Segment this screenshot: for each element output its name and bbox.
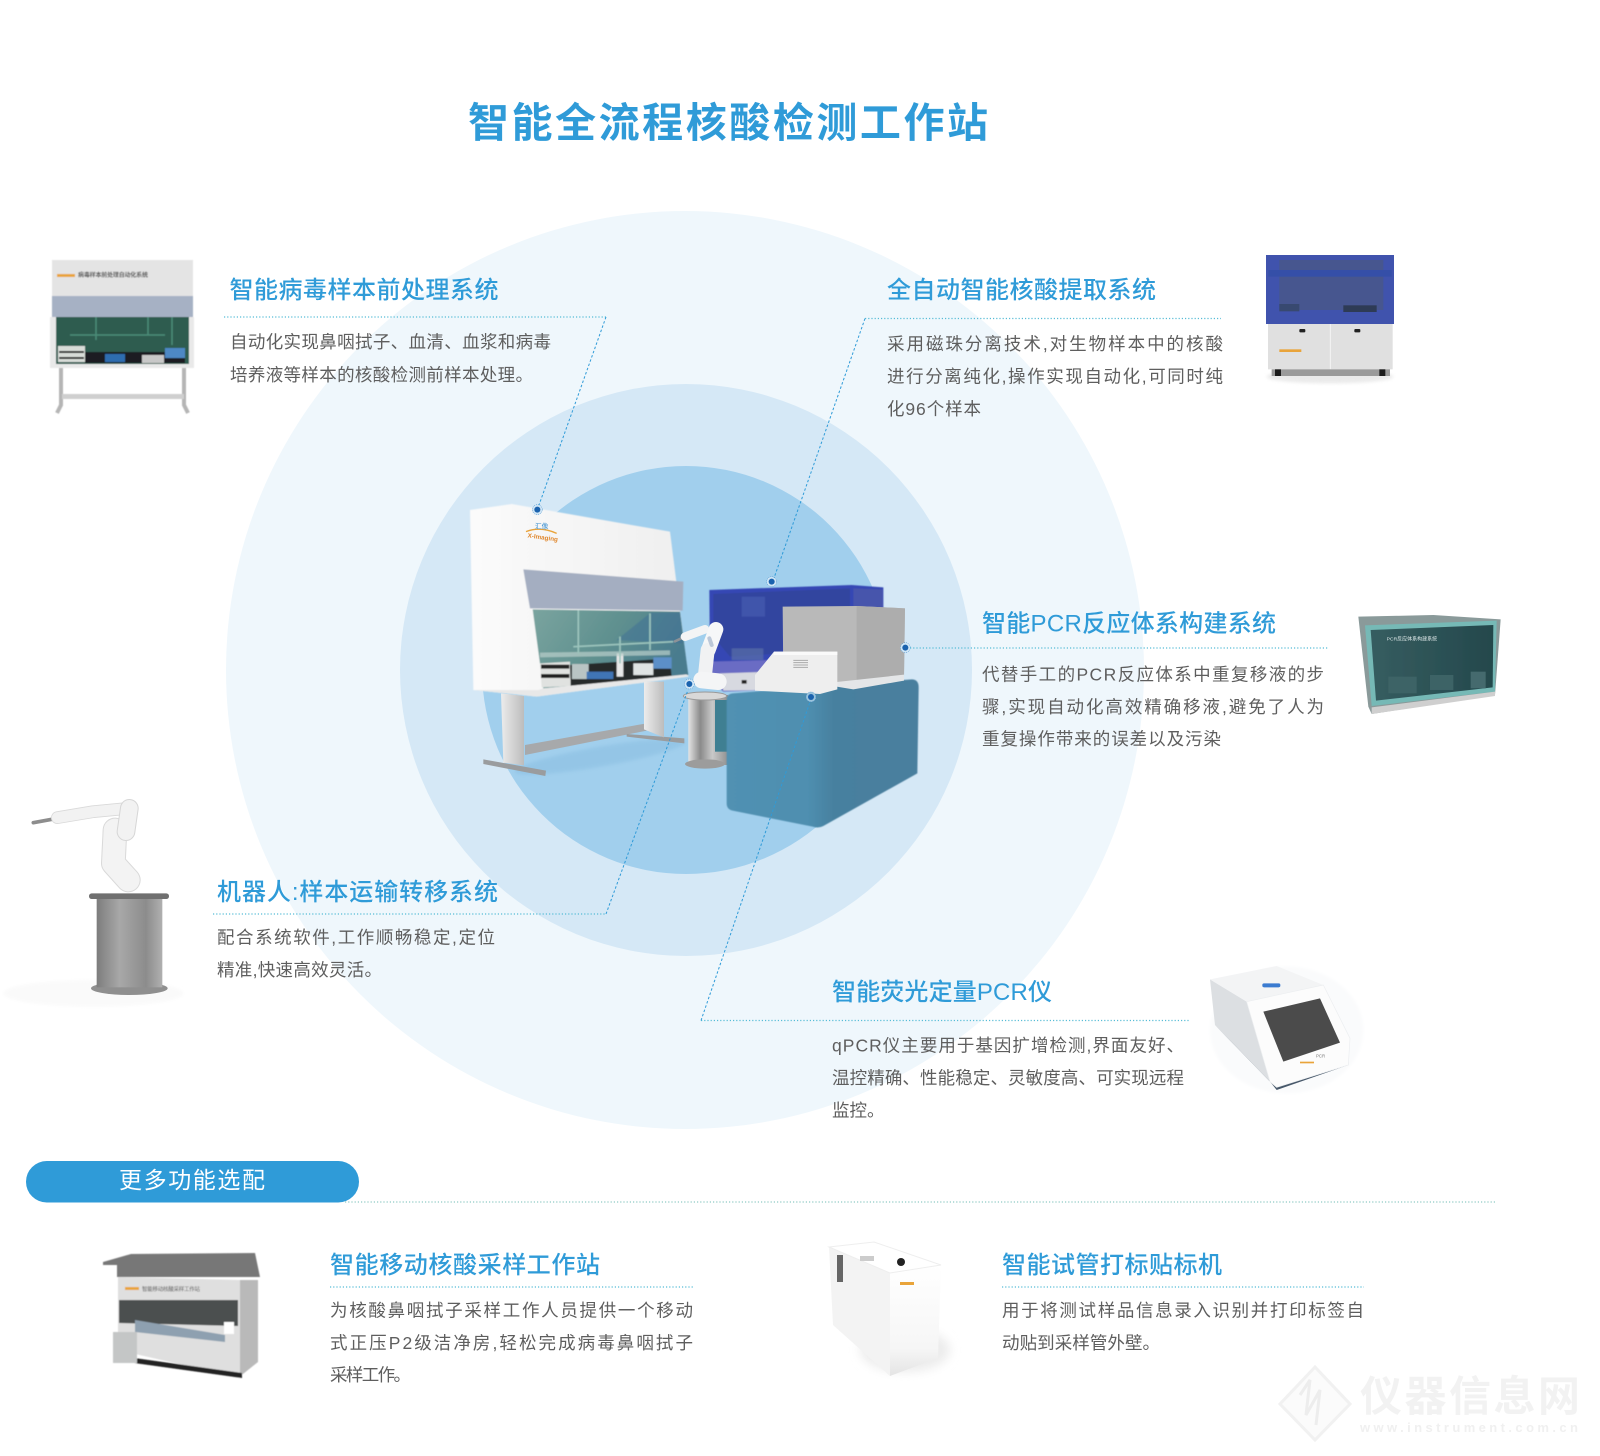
icon: mobile sampling station: 智能移动核酸采样工作站	[142, 1285, 200, 1293]
watermark: www.instrument.com.cn	[1359, 1420, 1578, 1435]
icon: pretreatment cabinet: 病毒样本前处理自动化系统	[78, 271, 148, 279]
description: 精准,快速高效灵活。	[217, 960, 382, 980]
description: 培养液等样本的核酸检测前样本处理。	[230, 365, 533, 385]
more options banner	[26, 1161, 1495, 1202]
icon: labeling machine	[829, 1242, 950, 1376]
panel: nucleic acid extraction system	[887, 255, 1394, 419]
cabinet legs and feet	[483, 682, 684, 776]
panel: mobile sampling workstation	[103, 1252, 693, 1385]
watermark	[1280, 1367, 1580, 1440]
description	[330, 1300, 693, 1385]
watermark: 仪器信息网	[1360, 1373, 1580, 1420]
robot arm	[675, 629, 718, 682]
small white control box	[755, 652, 837, 694]
heading: 智能PCR反应体系构建系统	[982, 610, 1276, 638]
description	[887, 334, 1223, 419]
heading: 机器人:样本运输转移系统	[217, 879, 498, 906]
icon: robot arm on pedestal	[3, 808, 183, 1007]
logo: X-Imaging	[527, 532, 558, 544]
extraction system (blue)	[709, 585, 883, 692]
panel: sample pretreatment system	[50, 260, 551, 413]
cabinet body	[470, 504, 688, 697]
logo	[526, 522, 558, 544]
icon: mobile sampling station	[103, 1253, 260, 1378]
concentric background circles	[226, 211, 1144, 1129]
panel: qPCR instrument	[832, 966, 1363, 1120]
description: 采用磁珠分离技术,对生物样本中的核酸	[887, 334, 1223, 354]
description: qPCR仪主要用于基因扩增检测,界面友好、	[832, 1036, 1184, 1056]
icon: PCR builder machine	[1358, 615, 1501, 714]
description: 采样工作。	[330, 1365, 411, 1385]
floor shadows	[513, 732, 687, 782]
description	[982, 664, 1324, 749]
description: 骤,实现自动化高效精确移液,避免了人为	[982, 697, 1324, 717]
heading: 智能移动核酸采样工作站	[330, 1252, 600, 1279]
panel: PCR reaction system builder	[982, 610, 1501, 749]
connection dots	[532, 505, 910, 702]
description: 进行分离纯化,操作实现自动化,可同时纯	[887, 366, 1223, 386]
decorative pill	[26, 1161, 359, 1202]
banner label: 更多功能选配	[119, 1167, 265, 1193]
description: 用于将测试样品信息录入识别并打印标签自	[1002, 1300, 1364, 1320]
heading: 智能病毒样本前处理系统	[230, 277, 498, 304]
description	[217, 928, 495, 980]
icon: pretreatment cabinet	[50, 260, 194, 413]
icon: qPCR device: PCR	[1316, 1053, 1325, 1058]
heading: 智能荧光定量PCR仪	[832, 979, 1052, 1006]
description: 式正压P2级洁净房,轻松完成病毒鼻咽拭子	[330, 1333, 693, 1353]
pedestal cylinder	[683, 692, 728, 769]
description	[832, 1036, 1184, 1120]
description: 化96个样本	[887, 399, 981, 419]
icon: extraction machine	[1266, 255, 1394, 383]
icon: PCR builder machine: PCR反应体系构建系统	[1387, 636, 1437, 643]
heading: 智能试管打标贴标机	[1002, 1252, 1222, 1279]
description: 配合系统软件,工作顺畅稳定,定位	[217, 928, 495, 948]
icon: watermark diamond	[1280, 1367, 1350, 1440]
title: 智能全流程核酸检测工作站	[468, 100, 988, 146]
description	[230, 332, 551, 385]
description: 监控。	[832, 1100, 884, 1120]
qPCR instrument (grey box)	[783, 606, 905, 689]
logo: 汇像	[535, 522, 549, 531]
description: 重复操作带来的误差以及污染	[982, 729, 1221, 749]
description: 为核酸鼻咽拭子采样工作人员提供一个移动	[330, 1300, 693, 1320]
callout leader lines	[213, 317, 1328, 1020]
icon: qPCR device	[1210, 966, 1363, 1093]
description	[1002, 1300, 1364, 1353]
description: 自动化实现鼻咽拭子、血清、血浆和病毒	[230, 332, 551, 352]
heading: 全自动智能核酸提取系统	[887, 277, 1156, 304]
panel: robot transfer system	[3, 808, 498, 1007]
description: 动贴到采样管外壁。	[1002, 1333, 1160, 1353]
panel: tube labeling machine	[829, 1242, 1364, 1376]
description: 代替手工的PCR反应体系中重复移液的步	[982, 664, 1324, 684]
central workstation illustration	[470, 504, 919, 828]
description: 温控精确、性能稳定、灵敏度高、可实现远程	[832, 1068, 1184, 1088]
teal table	[727, 679, 919, 828]
